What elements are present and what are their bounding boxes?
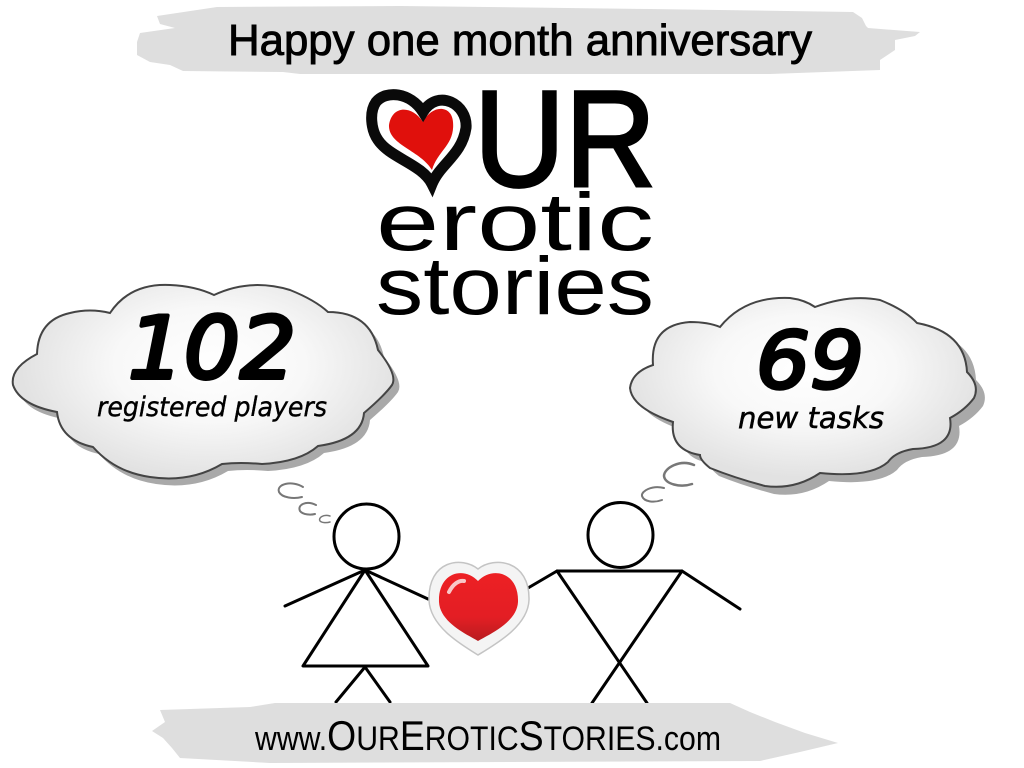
website url: www.OUREROTICSTORIES.com — [254, 712, 721, 759]
figure: woman — [285, 504, 428, 702]
logo word: erotic: erotic — [376, 177, 654, 268]
icon: logo heart — [372, 95, 466, 193]
logo word: stories: stories — [376, 241, 654, 332]
bottom banner — [152, 703, 838, 763]
right thought cloud — [630, 298, 985, 495]
logo — [372, 63, 656, 332]
label: registered players: registered players — [97, 392, 327, 423]
banner heading: Happy one month anniversary — [228, 16, 812, 65]
figure: man — [528, 502, 740, 703]
right thought bubbles — [642, 463, 694, 502]
logo word: UR: UR — [474, 63, 656, 216]
label: new tasks: new tasks — [738, 401, 884, 435]
left thought bubbles — [279, 483, 330, 523]
top banner — [137, 6, 920, 74]
number: 102: 102 — [128, 299, 296, 399]
icon: red heart sticker — [429, 562, 529, 655]
number: 69: 69 — [756, 317, 864, 407]
left thought cloud — [13, 285, 399, 485]
